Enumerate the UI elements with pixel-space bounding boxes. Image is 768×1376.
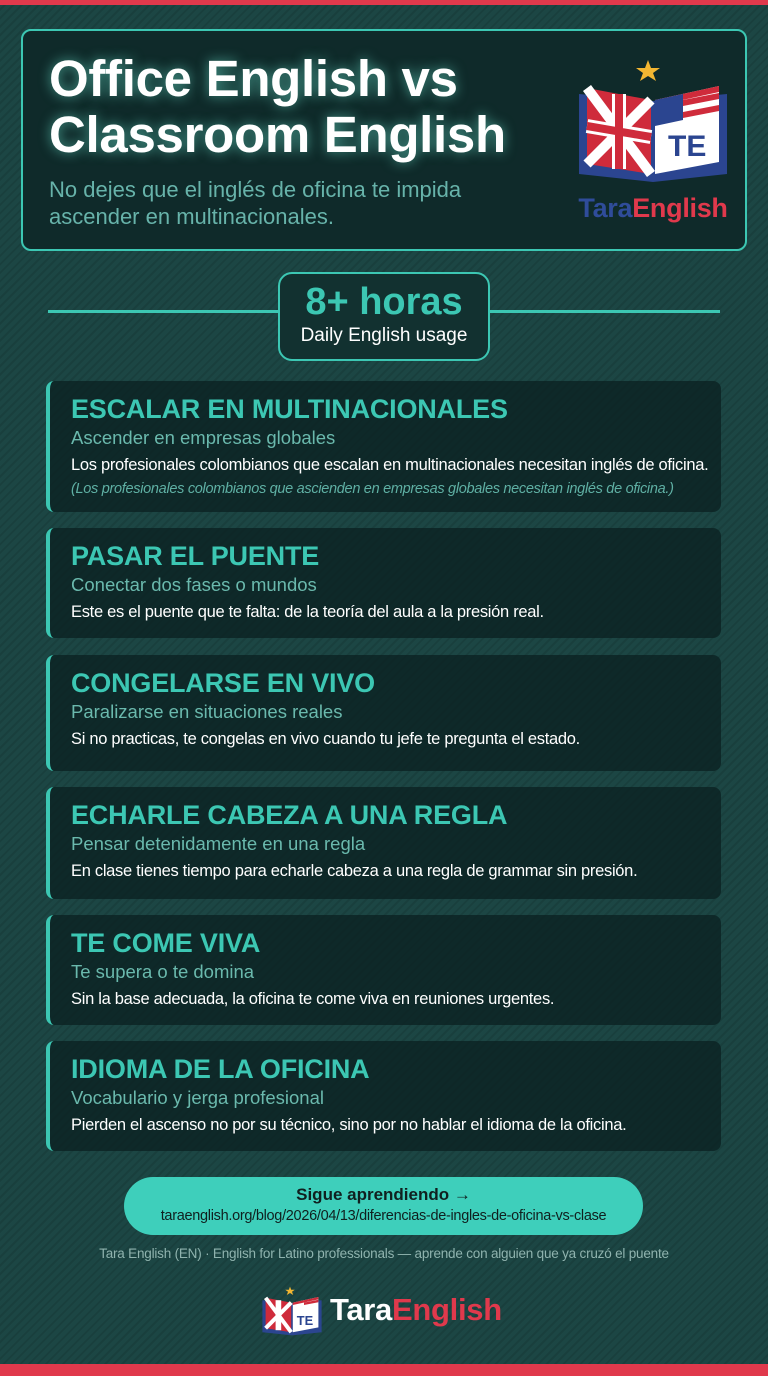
footer text: Tara English (EN) · English for Latino professionals — aprende con alguien que ya cruzó el puente xyxy=(99,1246,669,1261)
top red bar xyxy=(0,0,768,5)
stat badge: 8+ horas xyxy=(278,272,490,361)
card: escalar en multinacionales: Ascender en empresas globales xyxy=(71,427,335,448)
logo: TaraEnglish: TaraEnglish xyxy=(578,193,728,223)
card: te come viva: Sin la base adecuada, la oficina te come viva en reuniones urgentes. xyxy=(71,990,554,1008)
card: escalar en multinacionales xyxy=(46,381,721,512)
CTA button xyxy=(124,1177,643,1235)
card: escalar en multinacionales: (Los profesionales colombianos que ascienden en empresas globales necesitan inglés de oficina.) xyxy=(71,481,674,497)
card: echarle cabeza a una regla xyxy=(46,787,721,899)
card: idioma de la oficina xyxy=(46,1041,721,1151)
card: pasar el puente: Conectar dos fases o mundos xyxy=(71,574,317,595)
card: echarle cabeza a una regla: ECHARLE CABEZA A UNA REGLA xyxy=(71,800,507,830)
card: congelarse en vivo: CONGELARSE EN VIVO xyxy=(71,668,375,698)
card: congelarse en vivo: Paralizarse en situaciones reales xyxy=(71,701,342,722)
header panel xyxy=(21,29,747,251)
card: congelarse en vivo xyxy=(46,655,721,771)
card: pasar el puente: Este es el puente que te falta: de la teoría del aula a la presión real. xyxy=(71,603,544,621)
card: te come viva: TE COME VIVA xyxy=(71,928,260,958)
card: te come viva: Te supera o te domina xyxy=(71,961,254,982)
card: escalar en multinacionales: ESCALAR EN MULTINACIONALES xyxy=(71,394,508,424)
footer logo: TaraEnglish xyxy=(330,1292,502,1327)
card: pasar el puente: PASAR EL PUENTE xyxy=(71,541,319,571)
logo: TaraEnglish: TE xyxy=(668,130,706,163)
stat badge: 8+ horas: Daily English usage xyxy=(301,325,467,346)
card: idioma de la oficina: Pierden el ascenso no por su técnico, sino por no hablar el idioma de la oficina. xyxy=(71,1116,626,1134)
card: echarle cabeza a una regla: Pensar detenidamente en una regla xyxy=(71,833,365,854)
stat badge: 8+ horas: 8+ horas xyxy=(305,281,463,323)
card: idioma de la oficina: IDIOMA DE LA OFICINA xyxy=(71,1054,370,1084)
CTA button: taraenglish.org/blog/2026/04/13/diferencias-de-ingles-de-oficina-vs-clase xyxy=(161,1208,606,1224)
subtitle xyxy=(49,177,462,229)
card: echarle cabeza a una regla: En clase tienes tiempo para echarle cabeza a una regla de grammar sin presión. xyxy=(71,862,637,880)
CTA button: Sigue aprendiendo → xyxy=(296,1185,471,1204)
footer logo xyxy=(262,1286,502,1336)
bottom red bar xyxy=(0,1364,768,1376)
card: pasar el puente xyxy=(46,528,721,638)
title xyxy=(44,50,511,170)
footer logo: TE xyxy=(297,1313,314,1328)
title: Office English vs xyxy=(49,50,458,107)
card: idioma de la oficina: Vocabulario y jerga profesional xyxy=(71,1087,324,1108)
card: te come viva xyxy=(46,915,721,1025)
subtitle: ascender en multinacionales. xyxy=(49,204,334,229)
subtitle: No dejes que el inglés de oficina te impida xyxy=(49,177,461,202)
title: Classroom English xyxy=(49,106,506,163)
card: escalar en multinacionales: Los profesionales colombianos que escalan en multinacionales necesitan inglés de oficina. xyxy=(71,456,708,474)
divider line xyxy=(48,310,720,313)
logo: TaraEnglish xyxy=(578,60,728,223)
card: congelarse en vivo: Si no practicas, te congelas en vivo cuando tu jefe te pregunta el estado. xyxy=(71,730,580,748)
